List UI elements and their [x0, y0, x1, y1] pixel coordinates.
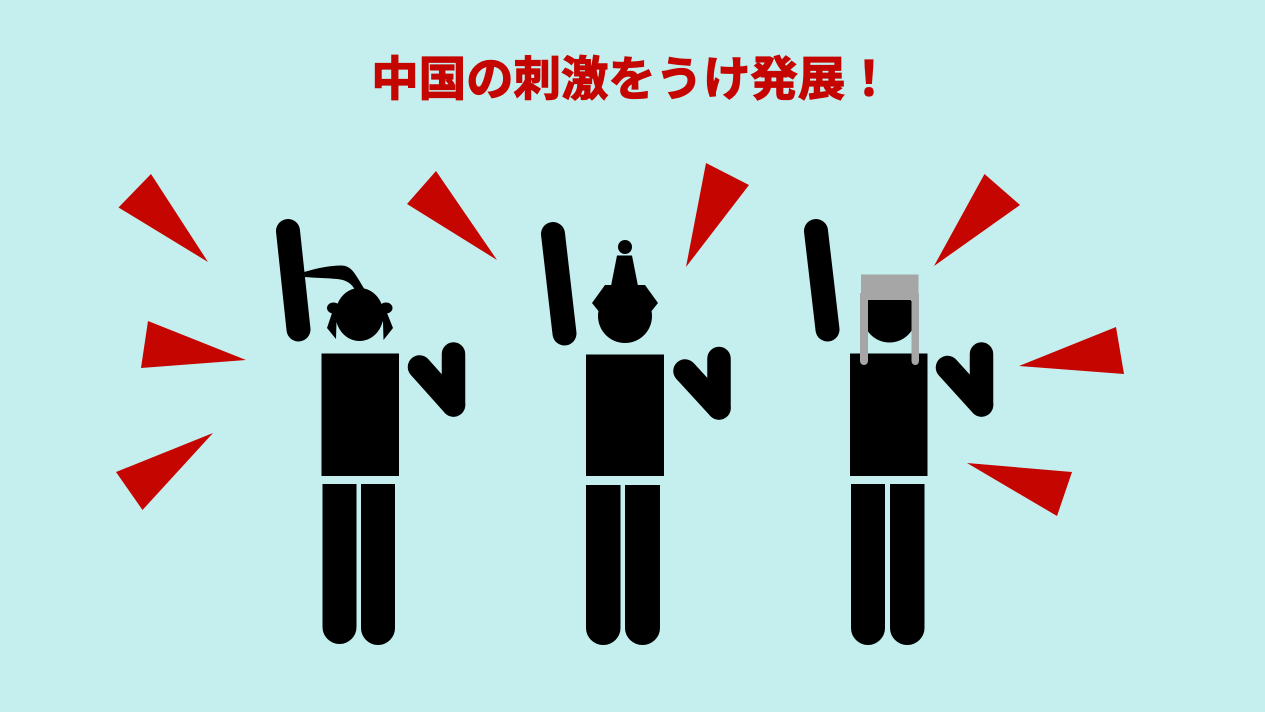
raised arm	[816, 231, 828, 330]
head	[598, 289, 652, 343]
head	[336, 288, 384, 341]
legs	[851, 484, 924, 645]
raised hand	[685, 358, 719, 408]
left burst marks	[116, 174, 246, 510]
raised arm	[288, 231, 298, 330]
head	[868, 300, 912, 342]
figure 2: person with tall court hat	[553, 234, 719, 645]
burst mark between first and second figures	[407, 171, 497, 260]
right burst marks	[934, 174, 1124, 516]
raised arm	[553, 234, 564, 334]
torso	[322, 354, 399, 476]
grey headdress	[860, 274, 919, 365]
torso	[850, 354, 928, 476]
title: 中国の刺激をうけ発展！	[371, 40, 893, 110]
legs	[322, 484, 395, 645]
figure 1: person with topknot and hair ties	[288, 231, 454, 645]
raised hand	[420, 354, 454, 405]
hair band	[304, 266, 365, 290]
figure 3: person with grey headdress	[816, 231, 982, 645]
burst mark between second and third figures	[686, 163, 749, 267]
torso	[586, 354, 664, 476]
hat	[592, 240, 658, 313]
legs	[586, 485, 660, 645]
hair knobs and ties	[327, 302, 393, 340]
raised hand	[948, 354, 982, 405]
